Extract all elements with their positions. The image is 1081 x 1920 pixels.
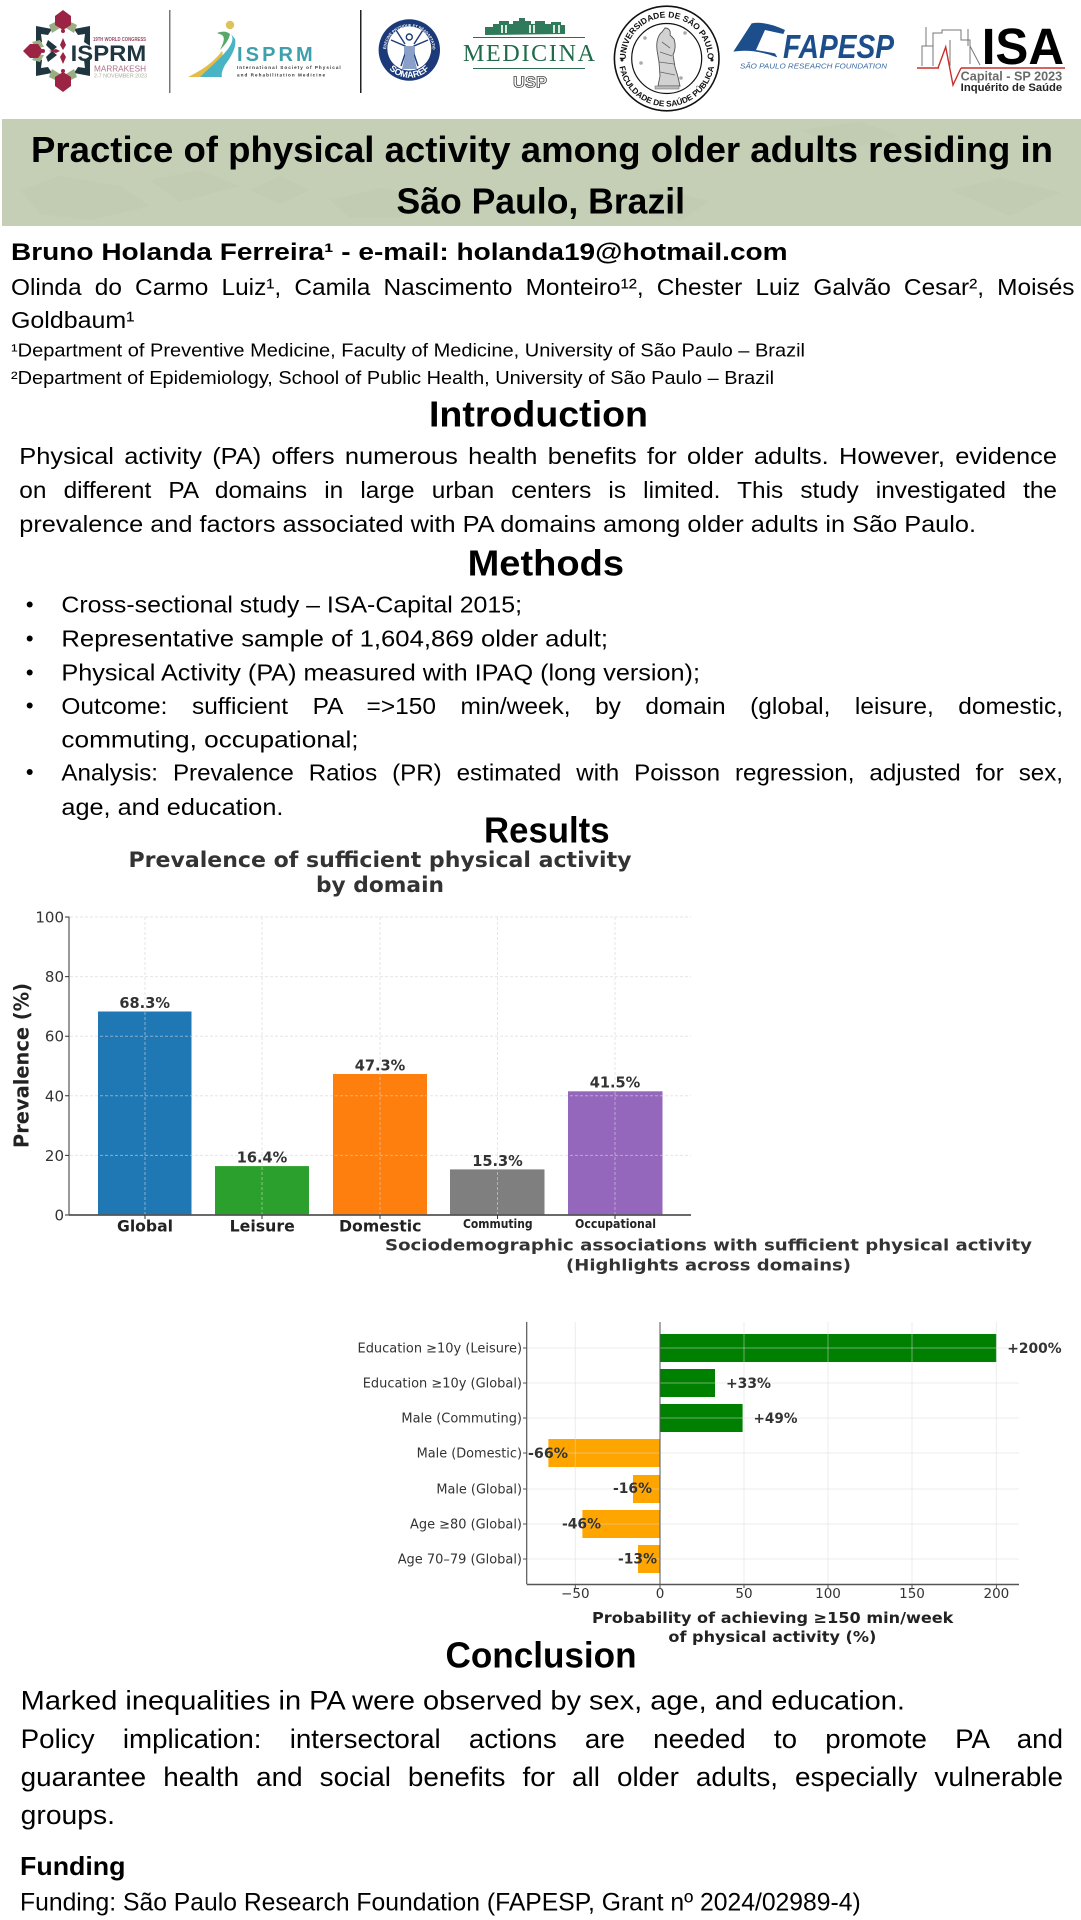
x axis tick labels: 0 (656, 1586, 664, 1602)
y axis tick labels (35, 908, 64, 1224)
y axis tick labels: 0 (54, 1206, 64, 1224)
chart title (385, 1236, 1033, 1275)
logo: ISPRM Marrakesh congress: MARRAKESH (94, 64, 146, 74)
value labels: 16.4% (237, 1148, 287, 1166)
heading: Methods: Methods (468, 543, 624, 584)
value labels (528, 1341, 1062, 1568)
x axis title (592, 1609, 954, 1646)
heading: Funding: Funding (20, 1851, 126, 1881)
methods bullet list (27, 592, 1063, 820)
title text: Practice of physical activity among older adults residing in (31, 129, 1053, 170)
affiliations: ²Department of Epidemiology, School of Public Health, University of São Paulo – Brazil (11, 368, 774, 388)
title banner (2, 119, 1081, 226)
section: methods (27, 543, 1063, 820)
x axis tick labels: 50 (735, 1586, 753, 1602)
logo: FAPESP (733, 23, 895, 71)
logo: SOMAREF (378, 19, 440, 81)
logo: ISPRM society: International Society of Physical (237, 65, 341, 70)
value labels: +49% (754, 1411, 798, 1427)
affiliations: ¹Department of Preventive Medicine, Faculty of Medicine, University of São Paulo – Brazil (11, 341, 805, 361)
conclusion text: groups. (21, 1800, 115, 1830)
methods bullet list: Cross-sectional study – ISA-Capital 2015; (61, 592, 522, 618)
conclusion text (21, 1685, 1063, 1830)
bars (98, 1012, 662, 1215)
value labels: -66% (528, 1446, 568, 1462)
methods bullet list: Physical Activity (PA) measured with IPAQ (long version); (61, 660, 700, 686)
co-authors (11, 274, 1074, 333)
title banner: São Paulo, Brazil (396, 180, 685, 221)
y axis title: Prevalence (%) (10, 983, 34, 1148)
logo text: ISPRM: ISPRM (71, 41, 146, 66)
logo text: FAPESP: FAPESP (783, 28, 895, 65)
presenting author: Bruno Holanda Ferreira¹ - e-mail: holanda19@hotmail.com (11, 239, 788, 266)
section: conclusion (21, 1635, 1063, 1830)
bars (548, 1334, 996, 1573)
introduction text (19, 443, 1057, 537)
y axis category labels: Education ≥10y (Global) (363, 1376, 522, 1392)
methods bullet list: Representative sample of 1,604,869 older adult; (61, 626, 608, 652)
chart: sociodemographic associations (358, 1236, 1062, 1646)
affiliations (11, 341, 805, 388)
logo: ISA Capital: Inquérito de Saúde (961, 82, 1062, 94)
x axis title: of physical activity (%) (668, 1628, 876, 1646)
y axis tick labels: 60 (45, 1028, 64, 1046)
value labels: 41.5% (590, 1074, 640, 1092)
logo: ISPRM Marrakesh congress: 2-7 NOVEMBER 2023 (94, 74, 147, 80)
value labels: 68.3% (119, 994, 170, 1012)
introduction text: prevalence and factors associated with PA domains among older adults in São Paulo. (19, 511, 976, 537)
heading: Conclusion: Conclusion (446, 1635, 636, 1676)
value labels: -16% (613, 1481, 652, 1497)
logo: ISPRM society: and Rehabilitation Medicine (237, 73, 325, 78)
section: funding (20, 1851, 861, 1917)
y axis tick labels: 100 (35, 908, 64, 926)
co-authors: Olinda do Carmo Luiz¹, Camila Nascimento Monteiro¹², Chester Luiz Galvão Cesar², Moisés (11, 274, 1074, 300)
seal text: bottom: FACULDADE DE SAÚDE PÚBLICA (620, 66, 714, 107)
logo: FAPESP: SÃO PAULO RESEARCH FOUNDATION (740, 62, 888, 70)
value labels (119, 994, 640, 1170)
logo text: USP: USP (513, 74, 547, 92)
y axis tick labels: 80 (45, 968, 64, 986)
section: introduction (19, 394, 1057, 537)
value labels: -46% (562, 1516, 601, 1532)
divider right (360, 10, 362, 93)
logo text: MEDICINA: MEDICINA (463, 41, 596, 67)
seal text: top: UNIVERSIDADE DE SÃO PAULO (620, 12, 714, 60)
y axis tick labels: 40 (45, 1087, 64, 1105)
value labels: 47.3% (355, 1056, 405, 1074)
logo text: ISA: ISA (982, 18, 1064, 75)
y axis category labels: Age 70–79 (Global) (398, 1552, 522, 1568)
logo: ISPRM Marrakesh congress (23, 10, 147, 92)
conclusion text: Marked inequalities in PA were observed by sex, age, and education. (21, 1685, 905, 1715)
x axis tick labels: 200 (984, 1586, 1009, 1602)
chart: prevalence by domain (10, 848, 691, 1236)
logo: Faculdade de Saude Publica seal (614, 5, 720, 112)
chart title (128, 848, 632, 897)
co-authors: Goldbaum¹ (11, 307, 135, 333)
chart title: by domain (316, 873, 444, 897)
y axis category labels: Age ≥80 (Global) (410, 1518, 522, 1532)
x axis title: Probability of achieving ≥150 min/week (592, 1609, 954, 1627)
heading: Introduction: Introduction (429, 394, 648, 435)
x axis tick labels: 150 (899, 1586, 925, 1602)
funding text: Funding: São Paulo Research Foundation (FAPESP, Grant nº 2024/02989-4) (20, 1889, 861, 1917)
y axis category labels: Education ≥10y (Leisure) (358, 1342, 522, 1356)
x axis tick labels (561, 1586, 1009, 1602)
y axis category labels (358, 1342, 522, 1568)
methods bullet list: commuting, occupational; (61, 726, 359, 752)
y axis tick labels: 20 (45, 1147, 64, 1165)
chart title: Prevalence of sufficient physical activity (128, 848, 632, 872)
logo text: SOMAREF: SOMAREF (390, 64, 428, 78)
value labels: +200% (1007, 1341, 1062, 1357)
introduction text: Physical activity (PA) offers numerous health benefits for older adults. However, evidence (19, 443, 1057, 469)
value labels: -13% (618, 1552, 657, 1568)
category labels (117, 1217, 656, 1236)
chart title: (Highlights across domains) (566, 1256, 851, 1275)
authors block (11, 239, 1074, 388)
y axis category labels: Male (Global) (436, 1482, 522, 1498)
conclusion text: Policy implication: intersectoral actions are needed to promote PA and (21, 1724, 1063, 1754)
value labels: +33% (726, 1376, 771, 1392)
x axis tick labels: −50 (561, 1586, 590, 1602)
logo: Medicina USP (463, 18, 596, 92)
conclusion text: guarantee health and social benefits for all older adults, especially vulnerable (21, 1762, 1063, 1792)
logo: ISPRM society (188, 21, 341, 78)
category labels: Domestic (339, 1217, 422, 1236)
logo text: ISPRM society: ISPRM (237, 44, 313, 66)
introduction text: on different PA domains in large urban centers is limited. This study investigated the (19, 477, 1057, 503)
category labels: Leisure (230, 1217, 295, 1236)
category labels: Commuting (463, 1217, 533, 1231)
heading: Results: Results (484, 810, 610, 851)
category labels: Global (117, 1217, 173, 1236)
methods bullet list: age, and education. (61, 794, 283, 820)
chart title: Sociodemographic associations with sufficient physical activity (385, 1236, 1033, 1255)
value labels: 15.3% (472, 1152, 523, 1170)
x axis tick labels: 100 (815, 1586, 841, 1602)
logo: ISA Capital (917, 18, 1065, 94)
y axis category labels: Male (Commuting) (401, 1412, 522, 1426)
logo: ISA Capital: Capital - SP 2023 (961, 70, 1062, 84)
logo: ISPRM Marrakesh congress: 19TH WORLD CONGRESS (93, 37, 147, 43)
methods bullet list: Outcome: sufficient PA =>150 min/week, by domain (global, leisure, domestic, (61, 693, 1063, 719)
methods bullet list: Analysis: Prevalence Ratios (PR) estimated with Poisson regression, adjusted for sex, (61, 760, 1063, 786)
header logos (23, 5, 1065, 112)
divider left (169, 10, 170, 93)
y axis category labels: Male (Domestic) (417, 1446, 522, 1462)
category labels: Occupational (575, 1217, 656, 1231)
